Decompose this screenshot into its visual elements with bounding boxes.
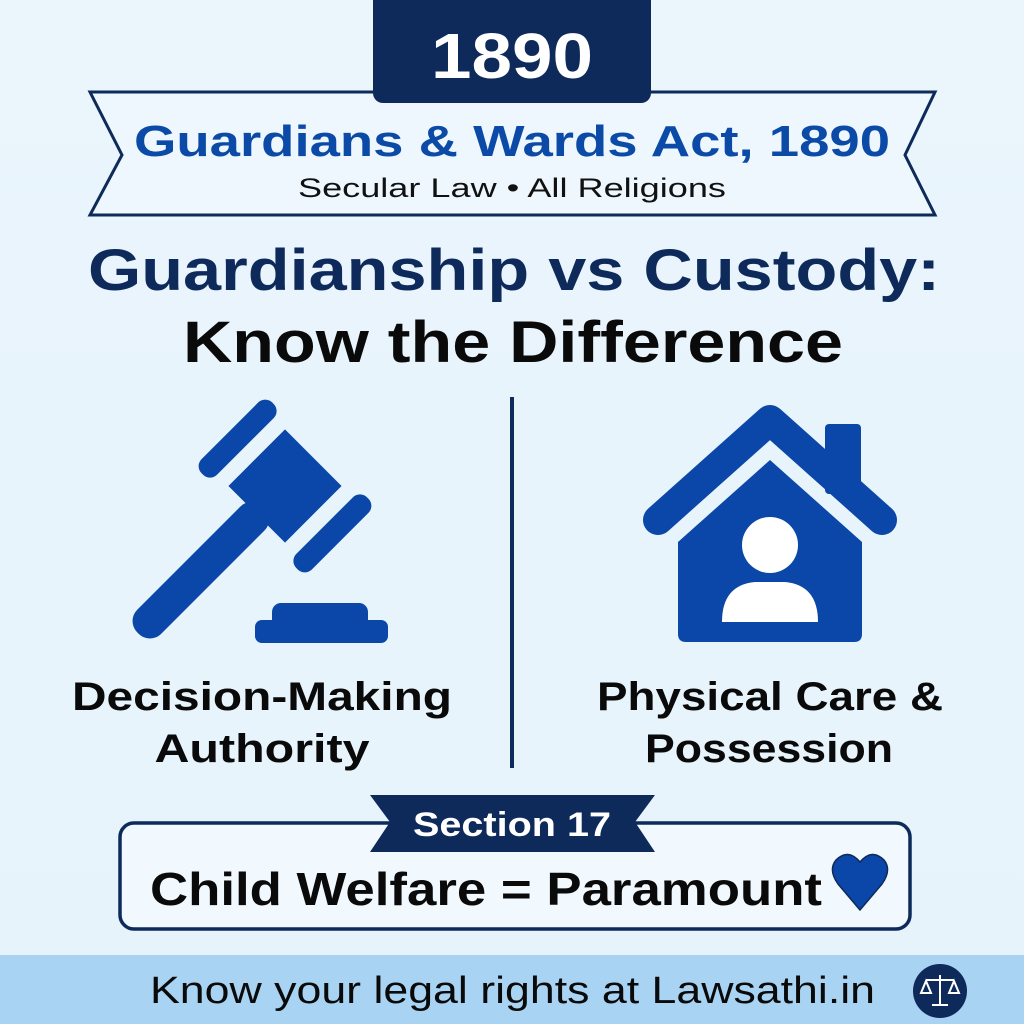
callout box: Child Welfare = Paramount	[150, 863, 822, 915]
subtitle: Secular Law • All Religions	[298, 173, 726, 203]
headline	[88, 238, 940, 375]
headline: Guardianship vs Custody:	[88, 238, 940, 303]
section banner	[370, 795, 655, 852]
label: custody	[597, 675, 943, 771]
footer: Know your legal rights at Lawsathi.in	[150, 970, 875, 1012]
icon: heart	[832, 854, 888, 910]
label: guardianship	[72, 675, 452, 771]
callout box	[120, 823, 910, 929]
label: guardianship: Decision-Making	[72, 675, 452, 719]
label: custody: Possession	[645, 727, 893, 771]
icon: house with child	[658, 420, 882, 642]
ribbon title: Guardians & Wards Act, 1890	[134, 117, 890, 166]
icon: scales logo	[913, 964, 967, 1018]
icon: gavel	[83, 395, 388, 688]
label: custody: Physical Care &	[597, 675, 943, 719]
year badge: 1890	[431, 20, 593, 92]
footer	[0, 955, 1024, 1024]
headline: Know the Difference	[183, 310, 843, 375]
ribbon banner	[90, 92, 935, 215]
year badge	[373, 0, 651, 103]
divider	[510, 397, 514, 768]
section banner: Section 17	[413, 806, 611, 844]
label: guardianship: Authority	[154, 727, 370, 771]
